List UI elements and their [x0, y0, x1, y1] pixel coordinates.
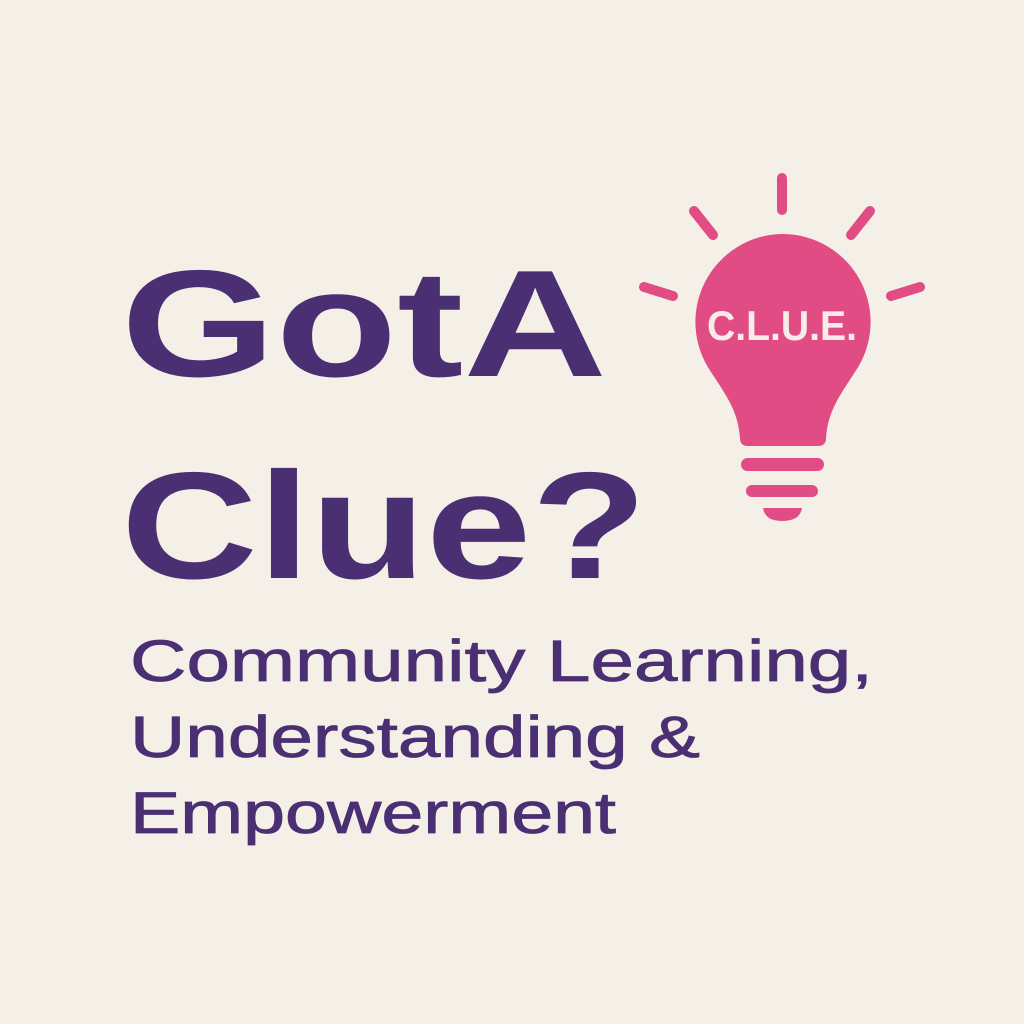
subtitle: Understanding & — [130, 705, 700, 770]
bulb label: C.L.U.E. — [707, 302, 857, 349]
subtitle — [130, 629, 873, 846]
bulb body — [695, 234, 871, 446]
bulb base — [741, 458, 824, 471]
icon: rays — [644, 178, 920, 296]
subtitle: Empowerment — [130, 781, 616, 846]
title: GotA — [121, 239, 607, 409]
subtitle: Community Learning, — [130, 629, 873, 694]
title: Clue? — [121, 441, 647, 611]
icon: lightbulb — [644, 178, 920, 521]
title — [121, 239, 647, 611]
